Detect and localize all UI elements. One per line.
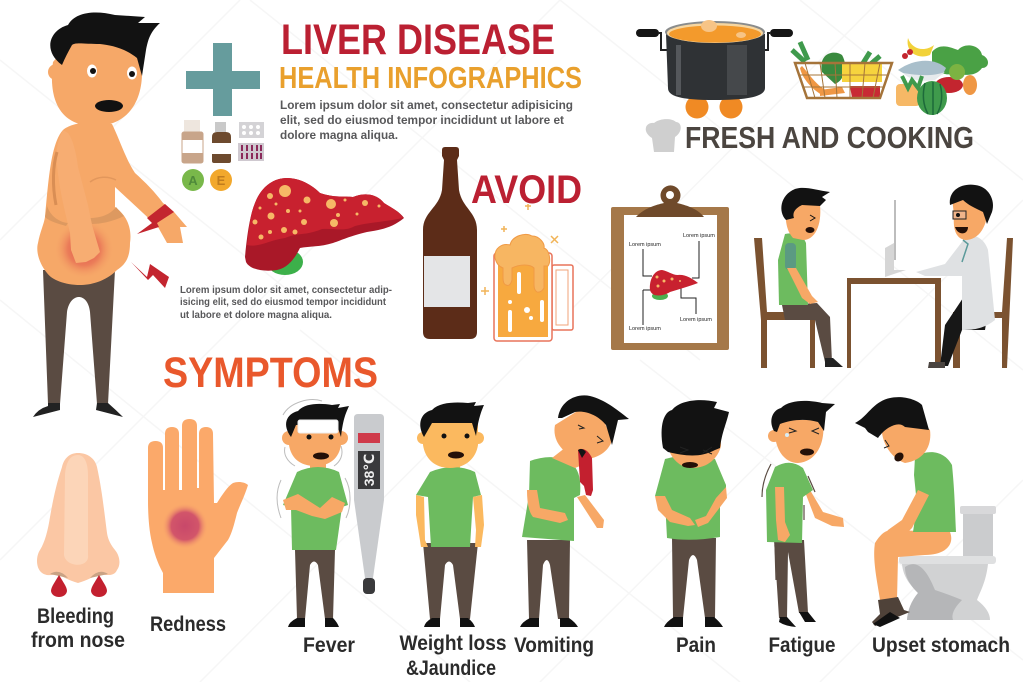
figure: vomiting bbox=[520, 395, 629, 627]
legs bbox=[782, 303, 832, 362]
icon: thermometer: 38℃ bbox=[361, 454, 377, 486]
toilet bowl bbox=[899, 556, 996, 564]
label: bleeding from nose: Bleeding bbox=[37, 605, 114, 628]
icon: fresh food pile bbox=[896, 38, 988, 115]
label: upset stomach: Upset stomach bbox=[872, 634, 1010, 657]
text block: intro: Lorem ipsum dolor sit amet, consectetur adipisicing bbox=[280, 98, 573, 112]
shirt bbox=[778, 233, 808, 305]
clipboard with liver diagram: Lorem ipsum bbox=[629, 326, 661, 332]
chair bbox=[953, 238, 1013, 368]
arm bbox=[883, 490, 929, 545]
clipboard with liver diagram bbox=[611, 185, 729, 350]
figure: weight loss and jaundice bbox=[416, 402, 484, 627]
label: pain: Pain bbox=[676, 634, 716, 657]
icon: medical cross bbox=[186, 43, 260, 116]
legs bbox=[43, 270, 115, 404]
man holding belly bbox=[33, 12, 187, 417]
small liver bbox=[650, 270, 698, 300]
clipboard with liver diagram: Lorem ipsum bbox=[683, 233, 715, 239]
icon: beer mug bbox=[481, 204, 573, 341]
text block: liver note: isicing elit, sed do eiusmod tempor incididunt bbox=[180, 296, 386, 308]
figure: upset stomach with toilet bbox=[855, 397, 996, 627]
text block: intro: elit, sed do eiusmod tempor incididunt ut labore et bbox=[280, 113, 564, 127]
doctor on chair bbox=[916, 185, 1013, 368]
label: bleeding from nose bbox=[31, 605, 125, 652]
icon: bleeding nose bbox=[37, 453, 119, 597]
icon: chef hat bbox=[646, 119, 681, 152]
text block: liver note: Lorem ipsum dolor sit amet, consectetur adip- bbox=[180, 284, 392, 296]
icon: belly lightning bbox=[131, 262, 169, 288]
icon: vegetable basket bbox=[792, 42, 892, 98]
diagram lines bbox=[643, 241, 699, 325]
heading: avoid: AVOID bbox=[471, 168, 582, 212]
icon: vitamin E bbox=[210, 169, 232, 191]
heading: symptoms: SYMPTOMS bbox=[163, 349, 378, 397]
lowered pants and shoe bbox=[872, 597, 910, 626]
icon: medicine bottles and pills bbox=[182, 120, 264, 163]
label: weight loss and jaundice: &Jaundice bbox=[406, 657, 496, 680]
doctor's desk and computer bbox=[847, 200, 941, 368]
heading: fresh and cooking: FRESH AND COOKING bbox=[685, 120, 974, 155]
icon: vitamin A bbox=[182, 169, 204, 191]
icon: vitamin A: A bbox=[188, 173, 198, 188]
head bbox=[952, 187, 988, 240]
toilet tank bbox=[963, 513, 993, 557]
head bbox=[882, 405, 930, 463]
text block: intro bbox=[280, 98, 573, 142]
head bbox=[786, 205, 820, 240]
icon: wrist lightning bbox=[137, 204, 174, 234]
head bbox=[52, 42, 142, 126]
patient on chair bbox=[754, 188, 843, 368]
glasses and mouth bbox=[953, 211, 966, 219]
label: bleeding from nose: from nose bbox=[31, 629, 125, 652]
icon: cooking pot bbox=[636, 20, 793, 118]
icon: red palm hand bbox=[148, 419, 248, 593]
icon: vitamin E: E bbox=[217, 173, 226, 188]
hair bbox=[50, 12, 160, 76]
text block: liver note bbox=[180, 284, 392, 321]
torso and arm bbox=[37, 122, 187, 285]
forearm and hand bbox=[56, 130, 100, 263]
coat bbox=[916, 236, 995, 330]
icon: thermometer bbox=[354, 414, 384, 594]
illustration: liver bbox=[245, 178, 404, 275]
shirt bbox=[913, 452, 956, 532]
figure: fatigue bbox=[762, 401, 844, 627]
belly shading bbox=[45, 206, 124, 226]
text block: intro: dolore magna aliqua. bbox=[280, 128, 398, 142]
label: vomiting: Vomiting bbox=[514, 634, 594, 657]
label: fever: Fever bbox=[303, 634, 355, 657]
label: redness: Redness bbox=[150, 613, 226, 636]
icon: bottle bbox=[423, 147, 477, 339]
label: weight loss and jaundice bbox=[400, 632, 506, 680]
figure: fever bbox=[277, 400, 350, 627]
label: fatigue: Fatigue bbox=[768, 634, 836, 657]
text block: liver note: ut labore et dolore magna aliqua. bbox=[180, 309, 332, 321]
title: liver disease: LIVER DISEASE bbox=[281, 16, 555, 64]
legs bbox=[874, 530, 951, 600]
legs bbox=[940, 298, 990, 366]
subtitle: health infographics: HEALTH INFOGRAPHICS bbox=[279, 60, 582, 95]
figure: pain bbox=[655, 400, 729, 627]
label: weight loss and jaundice: Weight loss bbox=[400, 632, 506, 655]
chair bbox=[754, 238, 815, 368]
clipboard with liver diagram: Lorem ipsum bbox=[629, 242, 661, 248]
clipboard with liver diagram: Lorem ipsum bbox=[680, 317, 712, 323]
eyes and mouth bbox=[87, 64, 97, 78]
